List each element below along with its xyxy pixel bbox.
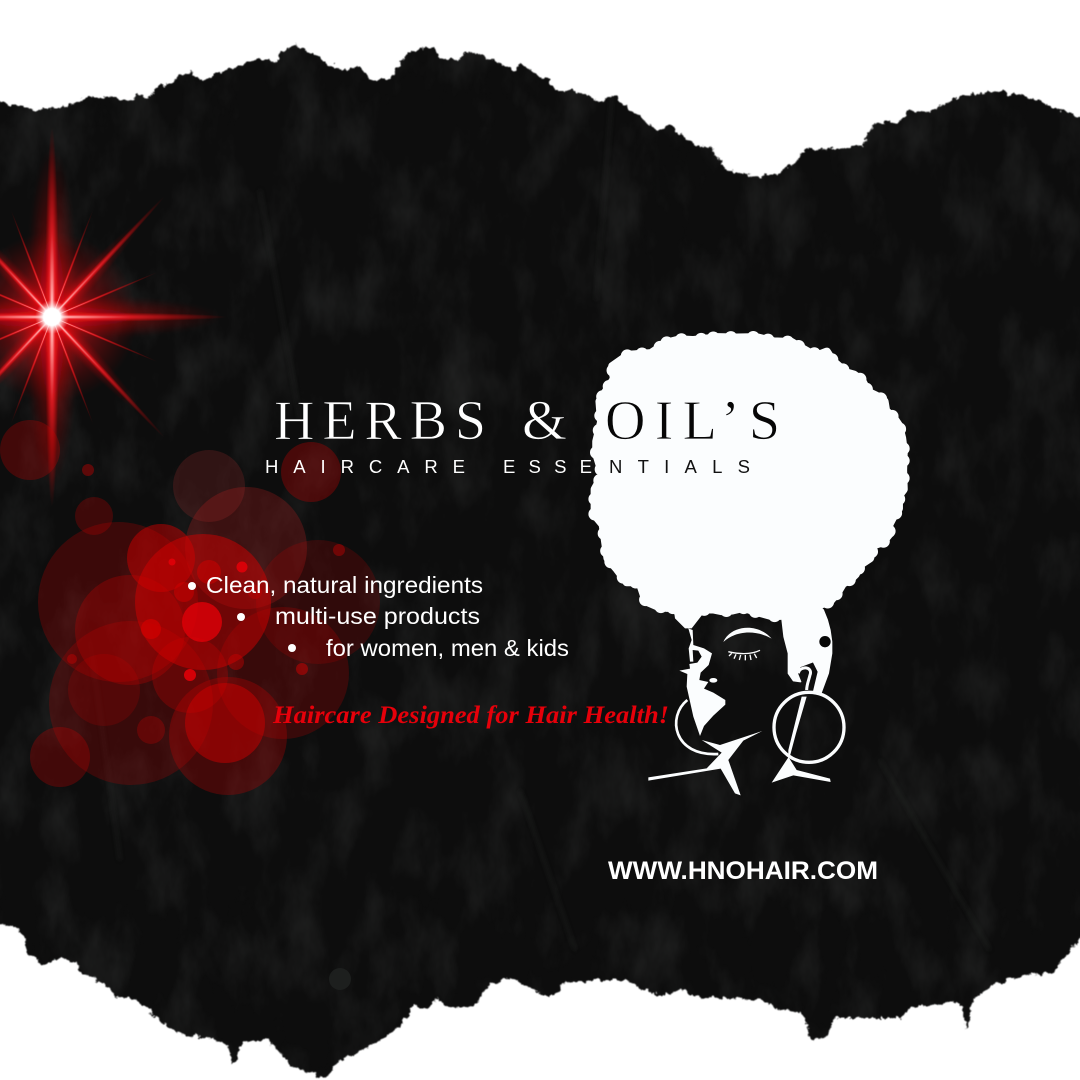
afro hair with scalloped edge — [595, 337, 904, 616]
neck right and ear drop — [772, 697, 831, 783]
bullet list: multi-use products — [275, 603, 480, 629]
nostril — [709, 678, 717, 683]
left hoop earring — [676, 700, 718, 754]
black stud dot — [819, 636, 831, 647]
right hair lock — [782, 600, 832, 694]
subtitle: HAIRCARE ESSENTIALS: ESSE — [503, 456, 592, 477]
tagline: Haircare Designed for Hair Health! — [272, 702, 669, 729]
bullet list: for women, men & kids — [326, 635, 569, 661]
neck left — [648, 731, 762, 795]
right hoop earring — [774, 692, 844, 762]
subtitle: HAIRCARE ESSENTIALS — [265, 456, 750, 477]
bullet list — [188, 572, 569, 661]
red bokeh circles — [0, 420, 380, 795]
bullet list: Clean, natural ingredients — [206, 572, 483, 598]
afro woman silhouette logo — [595, 337, 904, 795]
website url: WWW.HNOHAIR.COM — [608, 857, 878, 885]
title: HERBS & OIL'S — [274, 390, 780, 452]
red light flare — [0, 127, 227, 507]
title: HERBS & OIL'S: HERBS — [274, 390, 486, 452]
face profile — [679, 628, 725, 736]
subtitle: HAIRCARE ESSENTIALS: NTIALS — [609, 456, 750, 477]
forehead hair strand — [673, 607, 703, 628]
title: HERBS & OIL'S: OIL’S — [605, 390, 780, 452]
subtitle: HAIRCARE ESSENTIALS: HAIRCARE — [265, 456, 465, 477]
closed eye and lashes — [728, 650, 760, 660]
title: HERBS & OIL'S: & — [522, 390, 567, 452]
eyebrow — [723, 628, 772, 642]
ear detail — [798, 668, 811, 690]
